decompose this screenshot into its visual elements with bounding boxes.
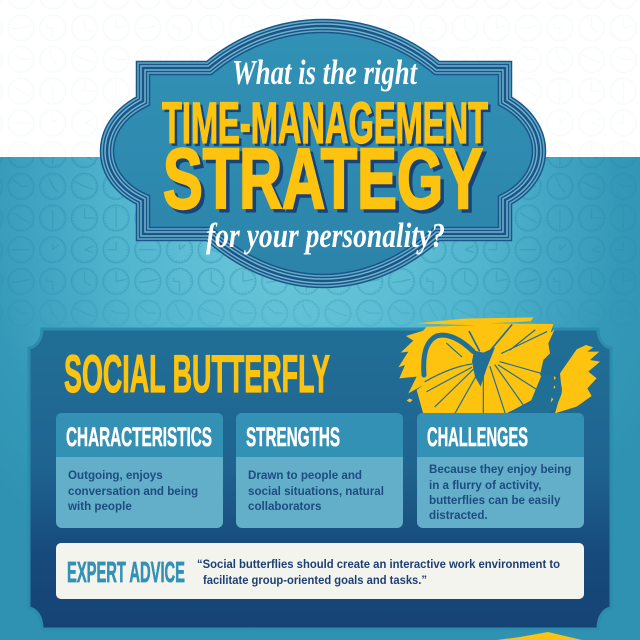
card text: Drawn to people and: [248, 469, 362, 482]
card heading: CHALLENGES: [427, 422, 528, 452]
card heading: STRENGTHS: [246, 422, 340, 452]
card text: in a flurry of activity,: [429, 479, 542, 492]
title line: what is the right: What is the right: [232, 53, 418, 92]
background: teal clock pattern: [0, 157, 640, 640]
card text: with people: [67, 500, 132, 513]
heading: social butterfly: SOCIAL BUTTERFLY: [64, 345, 330, 404]
title plaque: [107, 26, 539, 281]
card heading: CHARACTERISTICS: [66, 422, 212, 452]
card text: conversation and being: [68, 485, 198, 498]
callout: expert advice: [56, 543, 584, 599]
card text: Because they enjoy being: [429, 463, 571, 476]
card text: collaborators: [248, 500, 321, 513]
card text: social situations, natural: [248, 485, 384, 498]
title line: strategy: STRATEGY: [163, 132, 483, 227]
card: strengths: [236, 413, 403, 528]
card text: distracted.: [429, 509, 488, 522]
title line: strategy: [163, 132, 486, 230]
title line: time-management: [162, 91, 490, 158]
panel: social butterfly: [29, 317, 611, 629]
title line: for your personality: for your personality?: [206, 216, 445, 255]
background: white top with faint clocks: [0, 0, 640, 157]
callout quote: “Social butterflies should create an interactive work environment to: [197, 557, 560, 571]
callout quote: facilitate group-oriented goals and tasks.”: [203, 573, 427, 587]
card: challenges: [417, 413, 584, 528]
icon: butterfly brush: [398, 317, 600, 414]
icon: next butterfly brush top: [497, 632, 582, 640]
card text: Outgoing, enjoys: [68, 469, 163, 482]
title line: strategy: STRATEGY: [166, 136, 486, 230]
card text: butterflies can be easily: [429, 494, 561, 507]
callout label: EXPERT ADVICE: [67, 557, 185, 589]
card: characteristics: [56, 413, 223, 528]
